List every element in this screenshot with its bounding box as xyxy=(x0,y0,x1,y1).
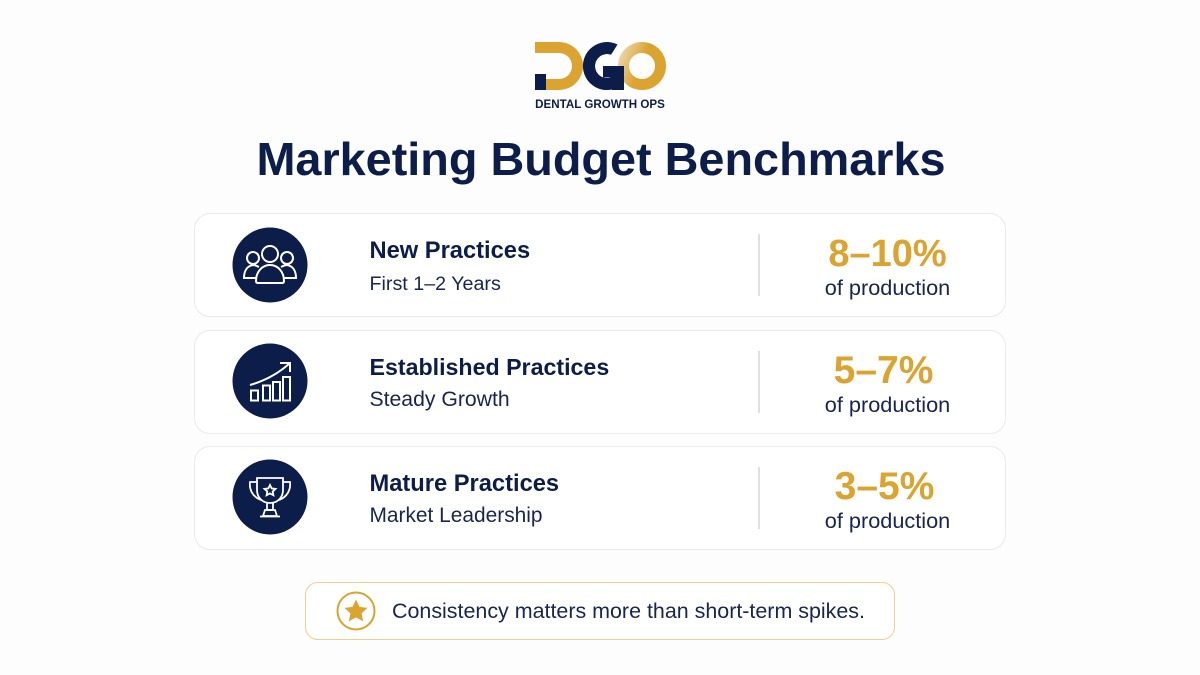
callout xyxy=(305,582,895,640)
callout text: Consistency matters more than short-term spikes. xyxy=(392,599,865,623)
logo square xyxy=(535,74,546,90)
icon: people xyxy=(232,228,308,302)
logo: Dental Growth Ops xyxy=(535,42,666,111)
subheading: Market Leadership xyxy=(370,504,543,526)
percentage: 3–5% xyxy=(835,464,934,508)
icon: trophy xyxy=(232,460,308,534)
subheading: First 1–2 Years xyxy=(370,272,501,294)
heading: Mature Practices xyxy=(370,470,559,496)
logo letter O xyxy=(624,48,660,84)
subheading: Steady Growth xyxy=(370,388,510,410)
panel: mature practices xyxy=(194,446,1006,550)
unit label: of production xyxy=(825,508,950,532)
heading: New Practices xyxy=(370,238,530,264)
icon: star xyxy=(336,592,376,630)
panel: new practices xyxy=(194,213,1006,317)
panel: established practices xyxy=(194,330,1006,434)
unit label: of production xyxy=(825,275,950,300)
logo letter D xyxy=(535,42,583,90)
logo letter G xyxy=(583,42,624,90)
percentage: 8–10% xyxy=(828,233,947,275)
logo wordmark: DENTAL GROWTH OPS xyxy=(535,98,665,111)
percentage: 5–7% xyxy=(834,348,933,392)
unit label: of production xyxy=(825,392,950,417)
icon: growth chart xyxy=(232,344,308,418)
title: Marketing Budget Benchmarks xyxy=(256,133,946,185)
heading: Established Practices xyxy=(370,354,609,380)
